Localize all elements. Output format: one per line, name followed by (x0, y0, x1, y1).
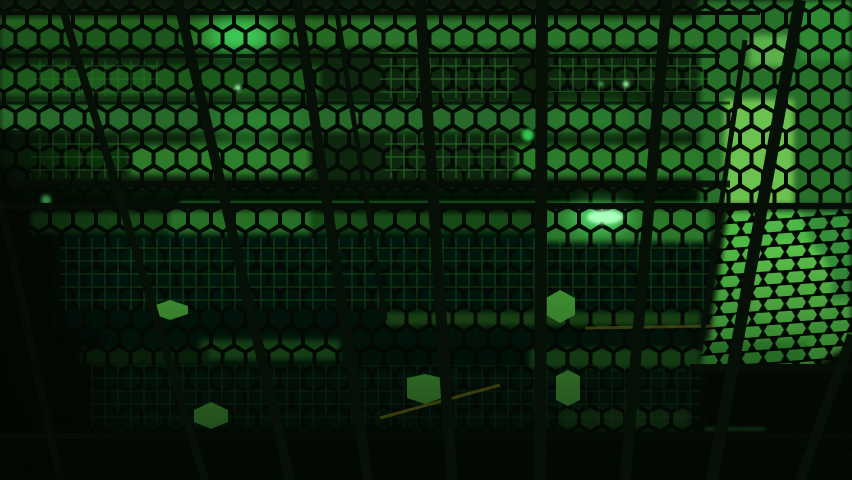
dim ambient light on the whole mesh (0, 0, 707, 370)
dark vignette (0, 130, 852, 480)
amber cable (380, 326, 715, 418)
status LEDs (41, 81, 765, 430)
wire grid behind the mesh (30, 52, 710, 427)
bright wall panel through flattened mesh, lower right (700, 210, 852, 368)
isolated lit mesh cells (153, 290, 580, 429)
